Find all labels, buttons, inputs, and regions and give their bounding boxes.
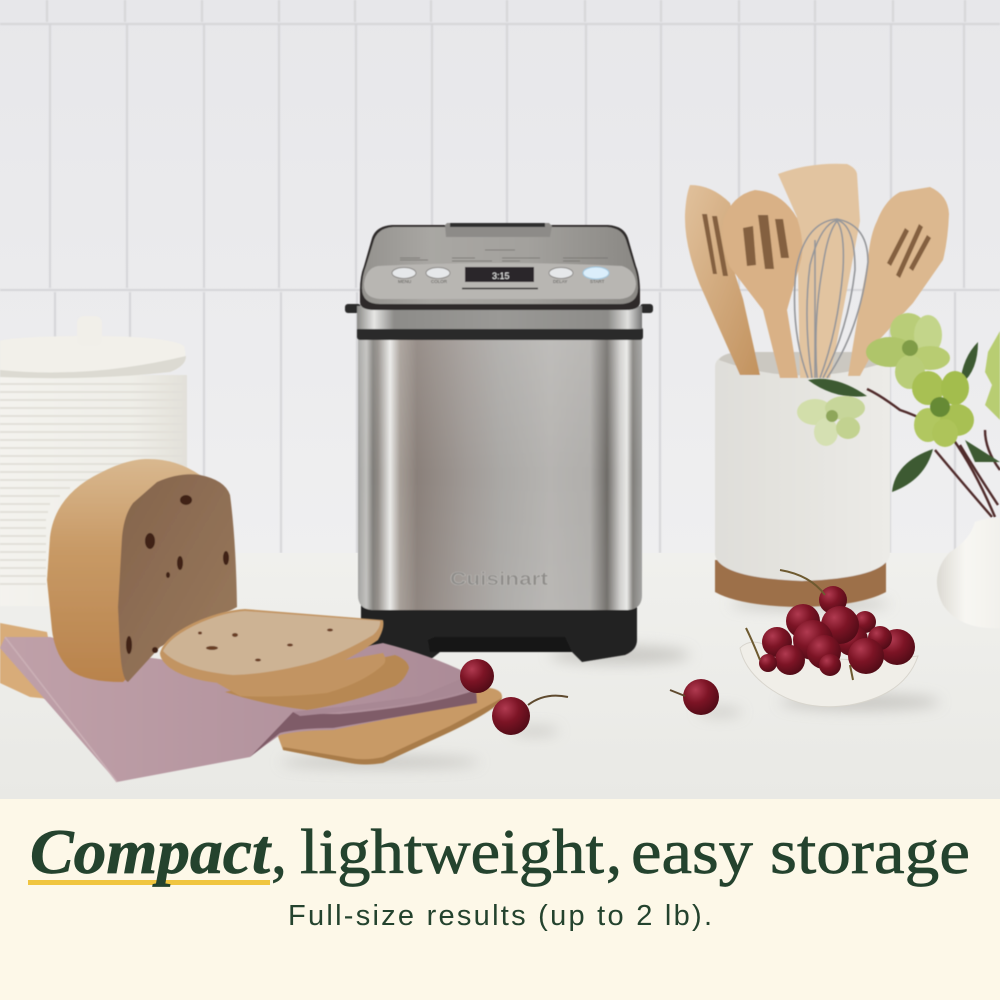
heading <box>30 816 970 887</box>
button labels: START <box>590 279 605 284</box>
bowl of cherries <box>740 570 918 707</box>
bottom slice <box>225 655 409 710</box>
button labels <box>398 279 605 284</box>
flower, right <box>912 371 974 447</box>
bread maker: 3:15 <box>492 271 510 281</box>
heading: , <box>271 816 287 887</box>
flower, far right <box>985 331 1000 420</box>
linen cloth <box>0 637 477 782</box>
dark seam and collar <box>357 327 643 340</box>
button labels: DELAY <box>553 279 567 284</box>
top slice <box>160 609 383 684</box>
side handles <box>345 304 361 313</box>
flower, left <box>797 396 865 446</box>
control program list <box>400 250 608 261</box>
pot opening <box>719 352 887 376</box>
background: countertop <box>0 553 1000 799</box>
buttons <box>392 267 609 279</box>
background: white tile wall <box>0 0 1000 556</box>
caption panel <box>0 799 1000 1000</box>
Cuisinart logo: Cuisinart <box>450 569 548 589</box>
slider <box>462 288 538 290</box>
display <box>465 267 534 282</box>
cutting board <box>0 623 502 764</box>
body steel <box>358 338 642 610</box>
heading: , <box>606 816 622 887</box>
heading: lightweight <box>300 816 604 887</box>
canister, left <box>0 316 187 606</box>
countertop shadows <box>280 598 940 768</box>
heading: storage <box>770 816 970 887</box>
loose cherries <box>460 659 719 735</box>
bread maker <box>345 223 653 662</box>
leaves <box>808 342 1000 492</box>
heading: Compact <box>30 816 272 887</box>
carrying handle <box>445 223 552 237</box>
vase and flowers <box>797 313 1000 628</box>
bread slices <box>160 609 409 710</box>
lid <box>360 225 640 310</box>
wooden utensils <box>685 164 949 378</box>
utensil crock <box>685 164 949 607</box>
subheading: Full-size results (up to 2 lb). <box>288 900 712 932</box>
wooden base <box>715 560 886 607</box>
middle slice <box>217 653 385 697</box>
button labels: MENU <box>398 279 411 284</box>
base <box>361 600 637 662</box>
flower, top <box>866 313 950 389</box>
heading highlight underline <box>28 880 270 885</box>
button labels: COLOR <box>431 279 448 284</box>
heading: easy <box>631 816 753 887</box>
ceramic pot <box>715 353 890 581</box>
loaf of bread <box>47 459 237 682</box>
